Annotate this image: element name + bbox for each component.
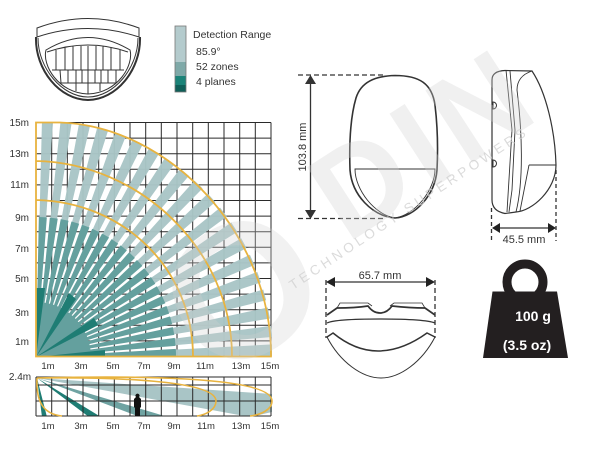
side chart labels: 15m — [261, 421, 279, 432]
watermark: DIN — [286, 20, 562, 267]
front view device with height dimension — [297, 75, 438, 219]
icon: person — [134, 394, 141, 416]
y-axis labels: 3m — [15, 308, 29, 319]
x-axis labels, top chart: 1m — [41, 361, 55, 372]
side chart labels: 1m — [41, 421, 55, 432]
front view device with height dimension: 103.8 mm — [297, 123, 309, 171]
side chart labels: 3m — [74, 421, 88, 432]
top-view coverage chart — [30, 120, 273, 363]
side-view coverage chart — [36, 377, 272, 417]
y-axis labels: 15m — [10, 118, 29, 129]
icon: weight 100 g — [483, 264, 568, 358]
x-axis labels, top chart: 9m — [167, 361, 181, 372]
legend: detection range: 4 planes — [196, 76, 236, 88]
side chart labels — [9, 372, 279, 432]
legend: detection range: 52 zones — [196, 61, 239, 73]
bottom view device with width dimension: 65.7 mm — [359, 270, 401, 282]
legend: detection range: Detection Range — [193, 29, 271, 41]
side chart labels: 2.4m — [9, 372, 31, 383]
y-axis labels: 5m — [15, 274, 29, 285]
x-axis labels, top chart: 7m — [137, 361, 151, 372]
legend: detection range: 85.9° — [196, 46, 221, 58]
y-axis labels: 9m — [15, 213, 29, 224]
x-axis labels, top chart: 11m — [196, 361, 214, 372]
legend: detection range — [175, 26, 271, 92]
side view device with depth dimension: 45.5 mm — [503, 234, 545, 246]
watermark: O — [122, 161, 361, 420]
y-axis labels: 11m — [10, 180, 29, 191]
y-axis labels: 7m — [15, 244, 29, 255]
side view device with depth dimension — [492, 70, 556, 246]
side chart labels: 13m — [232, 421, 250, 432]
side chart labels: 5m — [106, 421, 120, 432]
y-axis labels: 1m — [15, 337, 29, 348]
y-axis labels: 13m — [10, 149, 29, 160]
side chart labels: 7m — [137, 421, 151, 432]
side chart labels: 9m — [167, 421, 181, 432]
watermark: TECHNOLOGY SUPERPOWERS — [286, 123, 531, 293]
x-axis labels, top chart: 15m — [261, 361, 279, 372]
y-axis labels — [10, 118, 29, 348]
x-axis labels, top chart: 13m — [232, 361, 250, 372]
x-axis labels, top chart — [41, 361, 279, 372]
icon: weight 100 g: 100 g — [515, 308, 551, 324]
icon: weight 100 g: (3.5 oz) — [503, 337, 551, 353]
bottom view device with width dimension — [326, 270, 435, 378]
top-view detection pattern icon — [36, 18, 140, 100]
side chart labels: 11m — [197, 421, 215, 432]
x-axis labels, top chart: 5m — [106, 361, 120, 372]
x-axis labels, top chart: 3m — [74, 361, 88, 372]
watermark — [122, 20, 562, 420]
